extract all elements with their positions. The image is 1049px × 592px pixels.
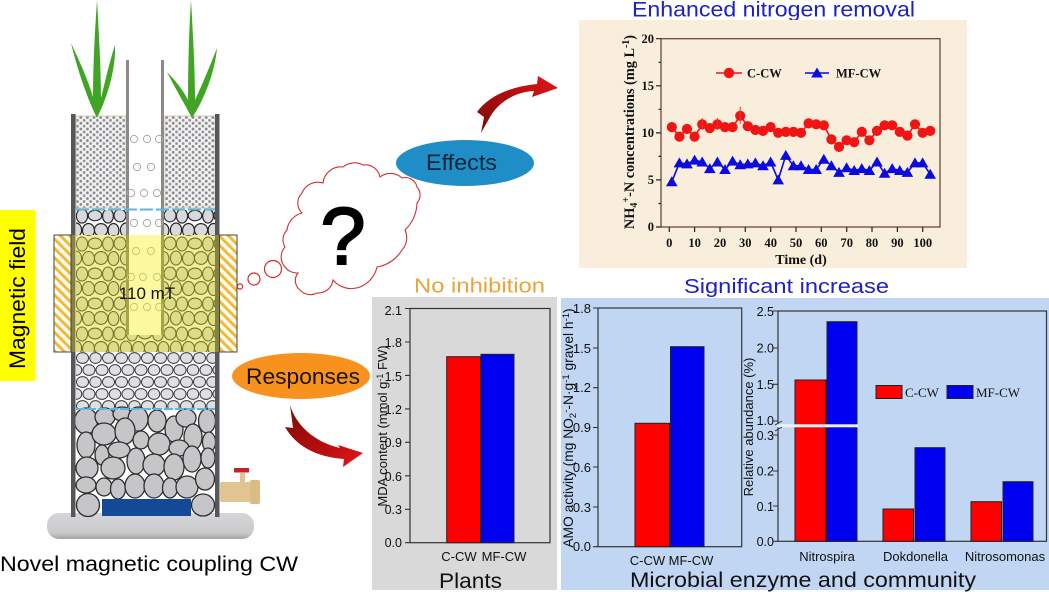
abundance tick labels: 2.5 xyxy=(757,305,774,319)
x axis tick labels: 90 xyxy=(891,236,904,250)
large pebble layer xyxy=(74,407,216,516)
arrow to plants chart xyxy=(285,405,363,467)
C-CW series xyxy=(672,116,930,147)
abundance tick labels: 1.5 xyxy=(757,378,774,392)
plants tick labels: 1.8 xyxy=(385,336,402,350)
responses oval: Responses xyxy=(246,364,360,389)
chart legend: C-CW xyxy=(747,66,782,80)
abundance tick labels: 1.0 xyxy=(757,414,774,428)
AMO tick labels: 0.6 xyxy=(573,460,591,475)
abundance tick labels: 2.0 xyxy=(757,342,774,356)
abundance category labels: Dokdonella xyxy=(883,549,949,564)
medium pebble layer above magnet xyxy=(76,210,215,235)
x axis tick labels: 80 xyxy=(866,236,878,250)
panel: plants xyxy=(372,297,557,592)
AMO bar labels xyxy=(630,553,714,568)
x axis tick labels: 50 xyxy=(790,236,802,250)
plants tick labels: 1.5 xyxy=(385,370,402,384)
AMO tick labels xyxy=(573,301,591,554)
panel: microbial enzyme and community xyxy=(561,298,1049,592)
right plant xyxy=(167,0,217,118)
x axis tick labels: 60 xyxy=(815,236,828,250)
y axis tick labels xyxy=(642,32,654,234)
y axis title: NH xyxy=(622,208,638,229)
AMO y axis title: -1 xyxy=(561,313,572,321)
plants chart frame xyxy=(410,308,550,543)
abundance tick labels: 0.2 xyxy=(757,464,774,478)
x axis title: Time (d) xyxy=(775,253,827,268)
AMO axis ticks xyxy=(593,308,598,547)
abundance legend: MF-CW xyxy=(976,385,1021,400)
small pebble layer xyxy=(76,352,215,409)
abundance axis ticks xyxy=(773,311,778,541)
axis ticks xyxy=(656,39,923,232)
plants tick labels xyxy=(385,304,402,550)
column outer walls xyxy=(71,114,220,517)
plants tick labels: 0.3 xyxy=(385,503,402,517)
pebbles inside magnetic field xyxy=(76,235,215,352)
AMO y axis title: gravel h xyxy=(561,321,576,374)
AMO tick labels: 0.0 xyxy=(573,539,591,554)
AMO tick labels: 1.2 xyxy=(573,380,591,395)
abundance legend xyxy=(876,385,1021,400)
magnet hatch left xyxy=(54,235,71,352)
x axis tick labels: 20 xyxy=(714,236,726,250)
x axis tick labels: 30 xyxy=(739,236,752,250)
x axis tick labels: 40 xyxy=(764,236,777,250)
field strength label: 110 mT xyxy=(119,284,175,303)
y axis title: 4 xyxy=(629,203,640,208)
AMO tick labels: 0.9 xyxy=(573,420,591,435)
heading: no inhibition: No inhibition xyxy=(414,274,545,298)
AMO tick labels: 1.8 xyxy=(573,301,591,316)
abundance tick labels xyxy=(757,305,774,549)
water level lower xyxy=(76,408,215,410)
air bubbles xyxy=(127,135,163,311)
AMO bar labels: MF-CW xyxy=(669,553,714,568)
x axis tick labels: 0 xyxy=(666,236,672,250)
abundance category labels: Nitrospira xyxy=(799,549,856,564)
plants bar labels: MF-CW xyxy=(482,549,527,564)
y axis title: -N concentrations (mg L xyxy=(622,48,638,197)
thought cloud: ? xyxy=(320,192,366,282)
AMO chart frame xyxy=(598,308,742,547)
AMO bars xyxy=(635,347,704,547)
x axis tick labels: 10 xyxy=(688,236,701,250)
water level upper xyxy=(76,208,215,210)
abundance y axis title: Relative abundance (%) xyxy=(741,358,756,496)
plants bars xyxy=(447,354,514,543)
y axis tick labels: 15 xyxy=(642,79,654,93)
MF-CW series xyxy=(672,155,930,182)
axis break xyxy=(775,421,858,431)
abundance bars xyxy=(795,322,1033,541)
central aeration tube xyxy=(126,60,164,335)
top gravel layer xyxy=(76,116,215,208)
plants tick labels: 0.6 xyxy=(385,470,402,484)
plants axis ticks xyxy=(405,308,410,543)
plants y axis title: MDA content (mmol g xyxy=(375,382,390,507)
abundance category labels: Nitrosomonas xyxy=(965,549,1046,564)
panel: nitrogen line chart xyxy=(579,20,967,268)
y axis tick labels: 10 xyxy=(642,126,654,140)
y axis tick labels: 5 xyxy=(648,173,654,187)
blue aerator block xyxy=(102,499,191,516)
plants bar labels xyxy=(441,549,527,564)
x axis tick labels xyxy=(666,236,932,250)
magnet hatch right xyxy=(220,235,237,352)
AMO y axis title: 2 xyxy=(568,413,579,418)
magnetic field label: Magnetic field xyxy=(5,228,30,369)
abundance tick labels: 0.3 xyxy=(757,429,774,443)
plants tick labels: 0.9 xyxy=(385,436,402,450)
AMO y axis title: AMO activity (mg NO xyxy=(561,418,576,548)
base plate xyxy=(47,513,254,539)
error bars xyxy=(702,107,740,130)
abundance legend: C-CW xyxy=(905,385,940,400)
wetland column diagram xyxy=(47,0,260,539)
AMO bar labels: C-CW xyxy=(630,553,666,568)
left plant xyxy=(71,0,115,118)
x axis tick labels: 70 xyxy=(840,236,853,250)
AMO tick labels: 0.3 xyxy=(573,500,591,515)
plants y axis title: FW) xyxy=(375,345,390,374)
plants bar labels: C-CW xyxy=(441,549,477,564)
y axis tick labels: 20 xyxy=(642,32,654,46)
plants tick labels: 0.0 xyxy=(385,536,402,550)
abundance tick labels: 0.1 xyxy=(757,500,774,514)
thought cloud xyxy=(237,163,420,295)
y axis title: ) xyxy=(622,35,638,40)
responses oval xyxy=(232,353,370,399)
AMO y axis title: ) xyxy=(561,308,576,313)
AMO y axis title: -N·g xyxy=(561,383,576,410)
chart frame xyxy=(661,39,940,227)
heading: significant increase: Significant increase xyxy=(684,275,889,298)
chart legend xyxy=(716,66,882,80)
plants tick labels: 1.2 xyxy=(385,403,402,417)
chart legend: MF-CW xyxy=(836,66,882,80)
magnetic field label xyxy=(0,210,36,381)
y axis title: -1 xyxy=(621,40,632,48)
effects oval xyxy=(396,140,534,186)
abundance category labels xyxy=(799,549,1046,564)
AMO y axis title: - xyxy=(561,410,572,413)
effects oval: Effects xyxy=(426,150,497,175)
y axis tick labels: 0 xyxy=(648,220,654,234)
plants tick labels: 2.1 xyxy=(385,304,402,318)
abundance chart frame xyxy=(778,311,1046,541)
column caption: Novel magnetic coupling CW xyxy=(0,552,299,576)
AMO tick labels: 1.5 xyxy=(573,341,591,356)
outlet valve xyxy=(220,468,260,504)
x axis tick labels: 100 xyxy=(913,236,932,250)
y axis title: + xyxy=(621,197,632,203)
arrow to nitrogen chart xyxy=(477,76,558,133)
plants y axis title: -1 xyxy=(375,374,385,382)
AMO y axis title: -1 xyxy=(561,374,572,383)
abundance tick labels: 0.0 xyxy=(757,535,774,549)
microbial caption: Microbial enzyme and community xyxy=(630,568,976,592)
